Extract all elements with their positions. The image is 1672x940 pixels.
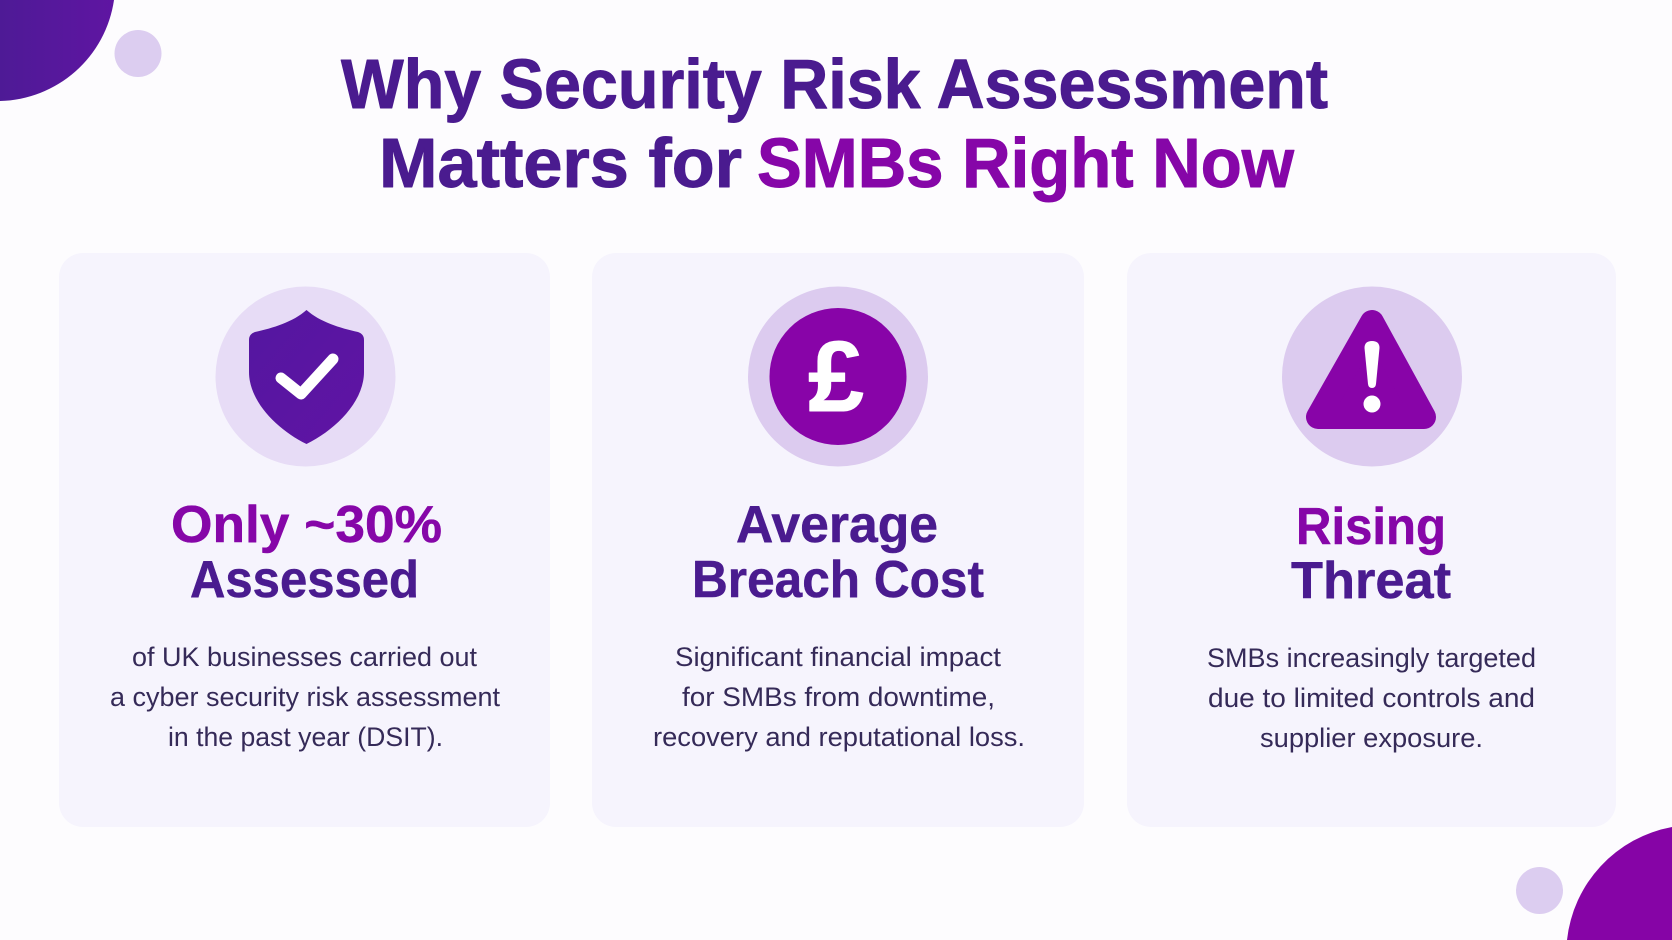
title: SMBs Right Now bbox=[757, 124, 1295, 202]
decoration: bottom-right small circle bbox=[1516, 867, 1563, 914]
title: Why Security Risk Assessment bbox=[341, 45, 1328, 123]
text: breach cost description: recovery and reputational loss. bbox=[653, 722, 1025, 752]
text: breach cost description bbox=[653, 642, 1025, 752]
panel: rising threat bbox=[1127, 253, 1616, 827]
decoration: top-left small circle bbox=[114, 30, 162, 77]
icon: warning triangle bbox=[1282, 286, 1462, 466]
decoration: bottom-right large circle bbox=[1567, 827, 1672, 940]
panel: only 30% assessed bbox=[59, 253, 550, 827]
text: breach cost description: for SMBs from downtime, bbox=[682, 682, 995, 712]
icon: shield with check bbox=[216, 286, 396, 466]
panel: average breach cost bbox=[592, 253, 1084, 827]
heading: average breach cost: Average bbox=[736, 496, 938, 554]
text: only 30% description: in the past year (DSIT). bbox=[168, 722, 443, 752]
text: rising threat description: due to limited controls and bbox=[1208, 683, 1535, 713]
title: Matters for bbox=[379, 124, 742, 202]
heading: average breach cost bbox=[692, 496, 984, 609]
text: breach cost description: Significant financial impact bbox=[675, 642, 1001, 672]
text: rising threat description: supplier exposure. bbox=[1260, 723, 1483, 753]
text: rising threat description: SMBs increasingly targeted bbox=[1207, 643, 1536, 673]
text: only 30% description: of UK businesses carried out bbox=[132, 642, 477, 672]
heading: average breach cost: Breach Cost bbox=[692, 551, 984, 609]
text: rising threat description bbox=[1207, 643, 1536, 753]
icon: pound coin: £ bbox=[808, 321, 864, 433]
text: only 30% description: a cyber security risk assessment bbox=[110, 682, 500, 712]
heading: rising threat bbox=[1291, 498, 1451, 610]
heading: only 30% assessed: Only ~30% bbox=[171, 496, 442, 554]
decoration: top-left large circle bbox=[0, 0, 114, 101]
heading: rising threat: Threat bbox=[1291, 552, 1451, 610]
title bbox=[341, 45, 1328, 202]
icon: pound coin bbox=[748, 286, 928, 466]
heading: rising threat: Rising bbox=[1296, 498, 1446, 556]
text: only 30% description bbox=[110, 642, 500, 752]
heading: only 30% assessed bbox=[171, 496, 442, 609]
heading: only 30% assessed: Assessed bbox=[190, 551, 419, 609]
